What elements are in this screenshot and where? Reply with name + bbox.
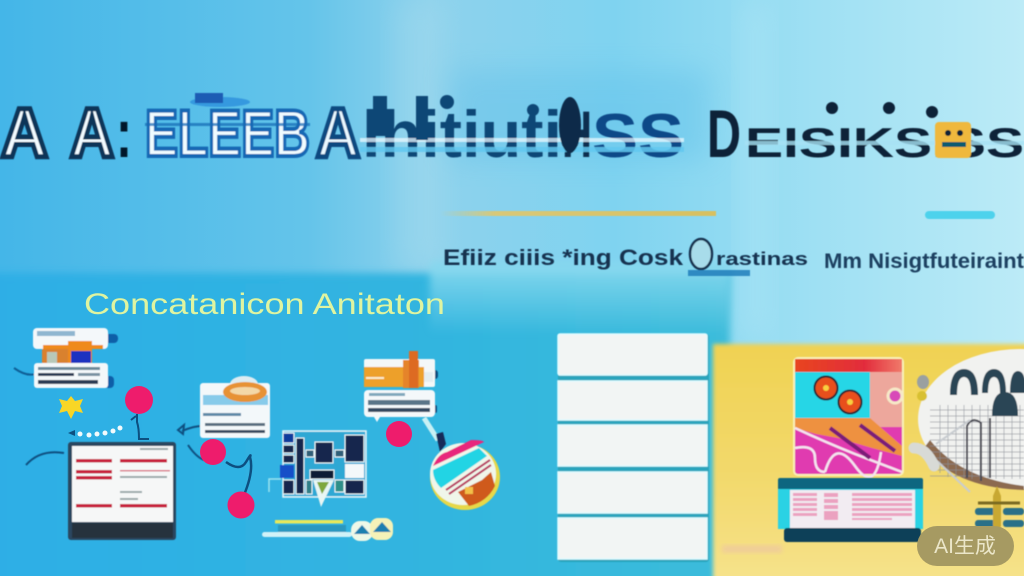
panel: yellow showcase area bbox=[713, 344, 1024, 576]
icon: pink node bbox=[386, 421, 412, 447]
title: A bbox=[316, 94, 360, 172]
accent rule: cyan bbox=[925, 211, 995, 219]
title: D bbox=[707, 96, 741, 172]
title bbox=[1, 93, 1024, 172]
title: A bbox=[70, 94, 114, 172]
icon: right orange card stack bbox=[364, 351, 438, 422]
icon: linked pink nodes bbox=[200, 439, 254, 518]
title: lhitiuti bbox=[362, 97, 562, 171]
subtitle: rastinas bbox=[716, 249, 808, 269]
title: H bbox=[562, 97, 592, 171]
icon: magnifier with coloured lens bbox=[424, 418, 500, 510]
badge: AI generated: AI生成 bbox=[934, 535, 996, 558]
icon: pink node with stem bbox=[125, 386, 153, 439]
panel: five-row empty table bbox=[558, 334, 709, 562]
title: : bbox=[116, 94, 132, 172]
panel: lower blue concept area bbox=[0, 262, 730, 576]
title: EISIKSISS bbox=[745, 119, 1024, 166]
title: A bbox=[1, 94, 48, 172]
icon: navy block grid bbox=[269, 431, 366, 507]
icon: yellow bar and mountain tags bbox=[262, 518, 393, 541]
icon: yellow star bbox=[59, 396, 83, 419]
subtitle: Efiiz ciiis *ing Cosk bbox=[443, 245, 684, 270]
dotted connector bbox=[68, 426, 122, 438]
icon: middle card with orange badge bbox=[178, 376, 270, 460]
subtitle bbox=[443, 239, 1024, 276]
accent rule: gold bbox=[440, 211, 716, 216]
icon: top-left stacked cards bbox=[14, 328, 118, 388]
icon: white globe with arches bbox=[914, 349, 1024, 492]
title: ELEEB bbox=[145, 96, 310, 170]
icon: colourful poster bbox=[793, 357, 904, 477]
section heading: Concatanicon Anitaton bbox=[84, 288, 445, 321]
icon: laptop with pink table bbox=[778, 478, 923, 542]
badge: AI generated bbox=[917, 526, 1014, 566]
icon: dashboard laptop bbox=[26, 442, 176, 540]
icon: small yellow aircraft bbox=[975, 486, 1024, 537]
title: SS bbox=[592, 102, 684, 171]
subtitle: Mm Nisigtfuteiraint bbox=[824, 250, 1024, 273]
